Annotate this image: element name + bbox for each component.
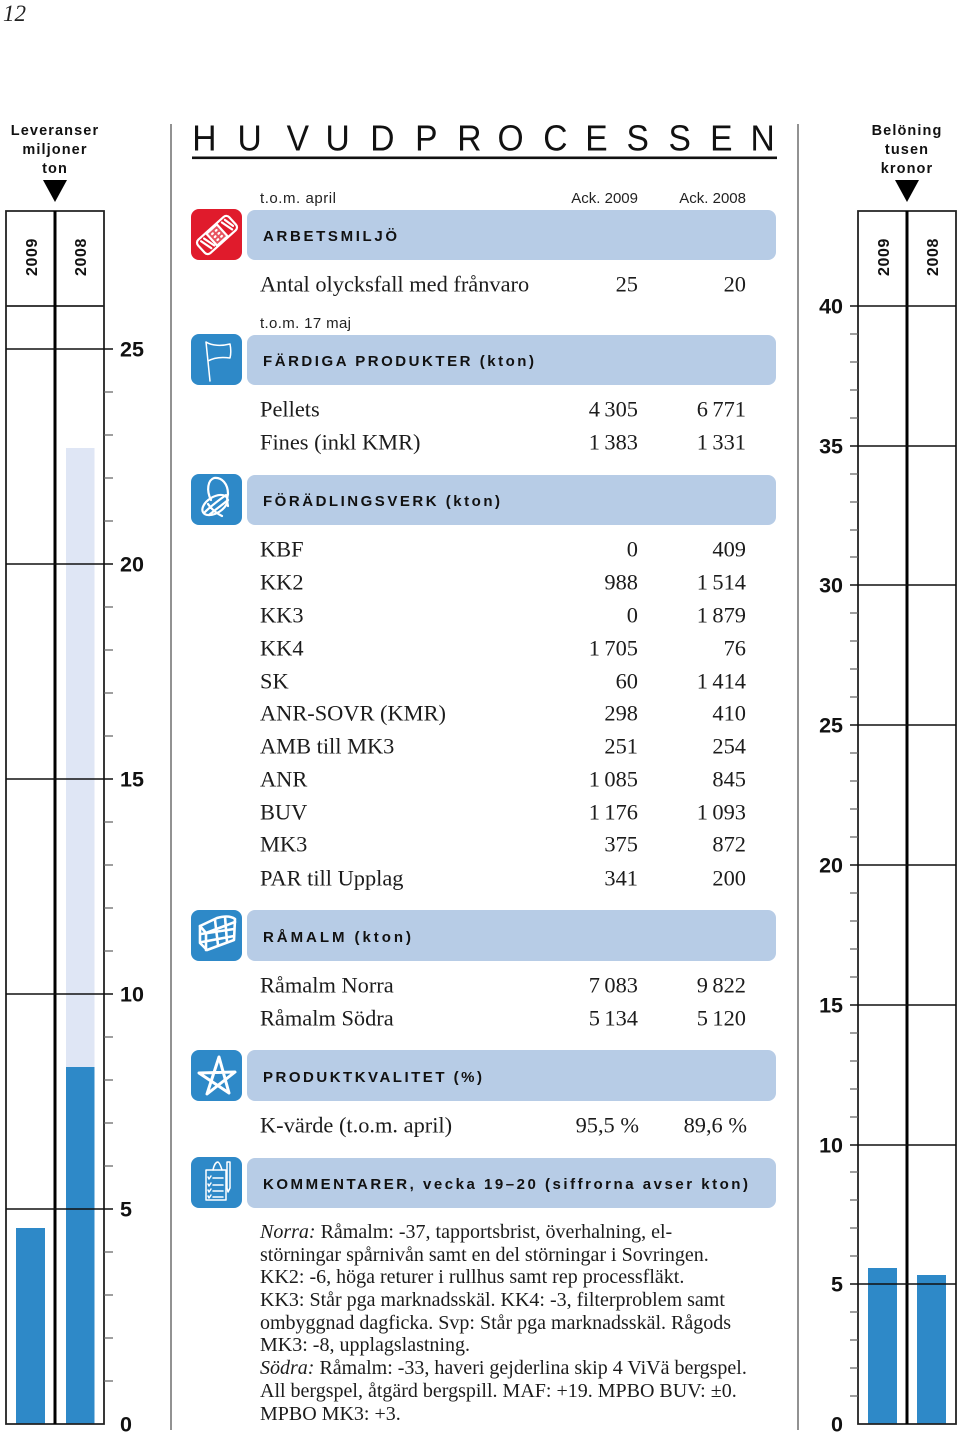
right chart heading: kronor [881, 161, 933, 177]
rows: 845 [712, 766, 746, 791]
left chart heading: miljoner [22, 142, 88, 158]
bar 2008 plan [66, 448, 94, 1067]
comment text: KK2: -6, höga returer i rullhus samt rep processfläkt. [260, 1266, 684, 1288]
comment text: KK3: Står pga marknadsskäl. KK4: -3, filterproblem samt [260, 1289, 725, 1311]
rows: 5 134 [589, 1005, 638, 1030]
panel: Färdiga produkter [191, 334, 776, 454]
right chart: Belöning [819, 123, 956, 1435]
rows: 1 176 [589, 799, 638, 824]
rows: Råmalm Norra [260, 972, 394, 997]
right chart axis numbers: 25 [819, 713, 843, 737]
rows: 1 705 [589, 635, 638, 660]
rows: 1 414 [697, 668, 746, 693]
heading bar [247, 335, 776, 385]
comment text: MK3: -8, upplagslastning. [260, 1334, 470, 1356]
right chart axis numbers: 35 [819, 434, 843, 458]
rows: 5 120 [697, 1005, 746, 1030]
heading bar [247, 475, 776, 525]
right chart axis numbers: 5 [831, 1272, 843, 1296]
rows: 200 [712, 865, 746, 890]
rows: 60 [616, 668, 638, 693]
rows: SK [260, 668, 289, 693]
rows: 251 [604, 733, 638, 758]
rows: 76 [724, 635, 746, 660]
icon: flag [191, 334, 242, 385]
rows: AMB till MK3 [260, 733, 394, 758]
rows: 872 [712, 831, 746, 856]
rows: KK2 [260, 569, 304, 594]
right chart axis numbers: 20 [819, 853, 843, 877]
right chart axis numbers: 40 [819, 294, 843, 318]
rows: 1 879 [697, 602, 746, 627]
column heading row: Ack. 2008 [679, 190, 746, 207]
rows: 375 [604, 831, 638, 856]
heading: PRODUKTKVALITET (%) [263, 1069, 482, 1086]
rows: PAR till Upplag [260, 865, 404, 890]
left chart: Leveranser [6, 123, 144, 1435]
heading: ARBETSMILJÖ [263, 228, 397, 245]
rows: 1 093 [697, 799, 746, 824]
right chart arrow [895, 180, 919, 202]
bar 2008 actual [66, 1067, 94, 1424]
comment text: Södra: Råmalm: -33, haveri gejderlina skip 4 ViVä bergspel. [260, 1357, 747, 1379]
icon: star [191, 1050, 242, 1101]
rows: Pellets [260, 396, 320, 421]
comment text: All bergspel, åtgärd bergspill. MAF: +19. MPBO BUV: ±0. [260, 1380, 737, 1402]
left chart arrow [43, 180, 67, 202]
right chart heading: tusen [885, 142, 929, 158]
panel: Råmalm [191, 910, 776, 1030]
rows: 410 [712, 700, 746, 725]
left chart year labels [24, 238, 90, 276]
comment text [259, 1221, 747, 1425]
column heading row: Ack. 2009 [571, 190, 638, 207]
left chart heading: ton [42, 161, 68, 177]
rows: KK3 [260, 602, 304, 627]
row: K-värde (t.o.m. april) [260, 1112, 452, 1137]
rows: MK3 [260, 831, 307, 856]
column heading row [260, 190, 746, 207]
icon: plaster [191, 209, 242, 260]
rows [260, 972, 746, 1030]
right chart axis numbers: 30 [819, 573, 843, 597]
rows: 1 514 [697, 569, 746, 594]
right chart year labels [876, 238, 942, 276]
panel: Förädlingsverk [191, 474, 776, 890]
left chart axis numbers: 25 [120, 337, 144, 361]
row: 89,6 % [684, 1112, 747, 1137]
bar 2009 [868, 1268, 897, 1424]
comment text: ombyggnad dagficka. Svp: Står pga marknadsskäl. Rågods [260, 1312, 731, 1334]
rows: KK4 [260, 635, 304, 660]
right chart axis numbers [819, 294, 843, 1435]
row [260, 1112, 747, 1137]
rows: 1 331 [697, 429, 746, 454]
row: 95,5 % [576, 1112, 639, 1137]
comment text: störningar spårnivån samt en del störningar i Sovringen. [260, 1244, 709, 1266]
heading: FÖRÄDLINGSVERK (kton) [263, 493, 500, 510]
heading bar [247, 1158, 776, 1208]
rows: 254 [712, 733, 746, 758]
rows: BUV [260, 799, 307, 824]
left chart axis numbers: 10 [120, 982, 144, 1006]
rows: 1 085 [589, 766, 638, 791]
right chart axis numbers: 10 [819, 1133, 843, 1157]
bar 2008 [917, 1275, 946, 1424]
heading bar [247, 1050, 776, 1101]
left chart year labels: 2009 [24, 238, 41, 276]
rows [260, 396, 746, 454]
left chart axis numbers: 5 [120, 1197, 132, 1221]
left chart axis numbers: 20 [120, 552, 144, 576]
vertical divider left [170, 124, 172, 1430]
panel: Produktkvalitet [191, 1050, 776, 1137]
right chart heading: Belöning [872, 123, 942, 139]
right chart year labels: 2008 [925, 238, 942, 276]
rows: 9 822 [697, 972, 746, 997]
rows: Fines (inkl KMR) [260, 429, 420, 454]
rows: 298 [604, 700, 638, 725]
row: 25 [616, 271, 638, 296]
heading: RÅMALM (kton) [263, 929, 411, 946]
panel: Kommentarer [191, 1157, 776, 1425]
column heading row: t.o.m. april [260, 190, 336, 207]
rows: ANR-SOVR (KMR) [260, 700, 446, 725]
rows: 409 [712, 536, 746, 561]
rows: 4 305 [589, 396, 638, 421]
date note: t.o.m. 17 maj [260, 315, 351, 332]
right chart heading [872, 123, 942, 177]
rows: 341 [604, 865, 638, 890]
comment text: MPBO MK3: +3. [260, 1403, 401, 1425]
right chart year labels: 2009 [876, 238, 893, 276]
icon: ore block [191, 910, 242, 961]
bar 2009 actual [16, 1228, 45, 1424]
rows: ANR [260, 766, 307, 791]
vertical divider right [797, 124, 799, 1430]
heading bar [247, 910, 776, 961]
icon: checklist [191, 1157, 242, 1208]
rows: Råmalm Södra [260, 1005, 394, 1030]
left chart axis numbers [120, 337, 144, 1435]
rows: 1 383 [589, 429, 638, 454]
rows: 7 083 [589, 972, 638, 997]
rows: KBF [260, 536, 304, 561]
row [260, 271, 746, 296]
rows: 6 771 [697, 396, 746, 421]
rows: 0 [627, 602, 638, 627]
page number: 12 [3, 1, 26, 26]
rows: 988 [604, 569, 638, 594]
rows [260, 536, 746, 890]
right chart axis numbers: 15 [819, 993, 843, 1017]
heading: FÄRDIGA PRODUKTER (kton) [263, 353, 534, 370]
left chart year labels: 2008 [73, 238, 90, 276]
comment text: Norra: Råmalm: -37, tapportsbrist, överhalning, el- [259, 1221, 672, 1243]
panel: Arbetsmiljö [191, 209, 776, 296]
heading: KOMMENTARER, vecka 19–20 (siffrorna avser kton) [263, 1176, 748, 1193]
left chart heading [11, 123, 99, 177]
left chart heading: Leveranser [11, 123, 99, 139]
rows: 0 [627, 536, 638, 561]
row: Antal olycksfall med frånvaro [260, 271, 529, 296]
row: 20 [724, 271, 746, 296]
title: HUVUDPROCESSEN [192, 118, 775, 159]
icon: pellet sack [191, 474, 242, 525]
left chart axis numbers: 15 [120, 767, 144, 791]
heading bar [247, 210, 776, 260]
